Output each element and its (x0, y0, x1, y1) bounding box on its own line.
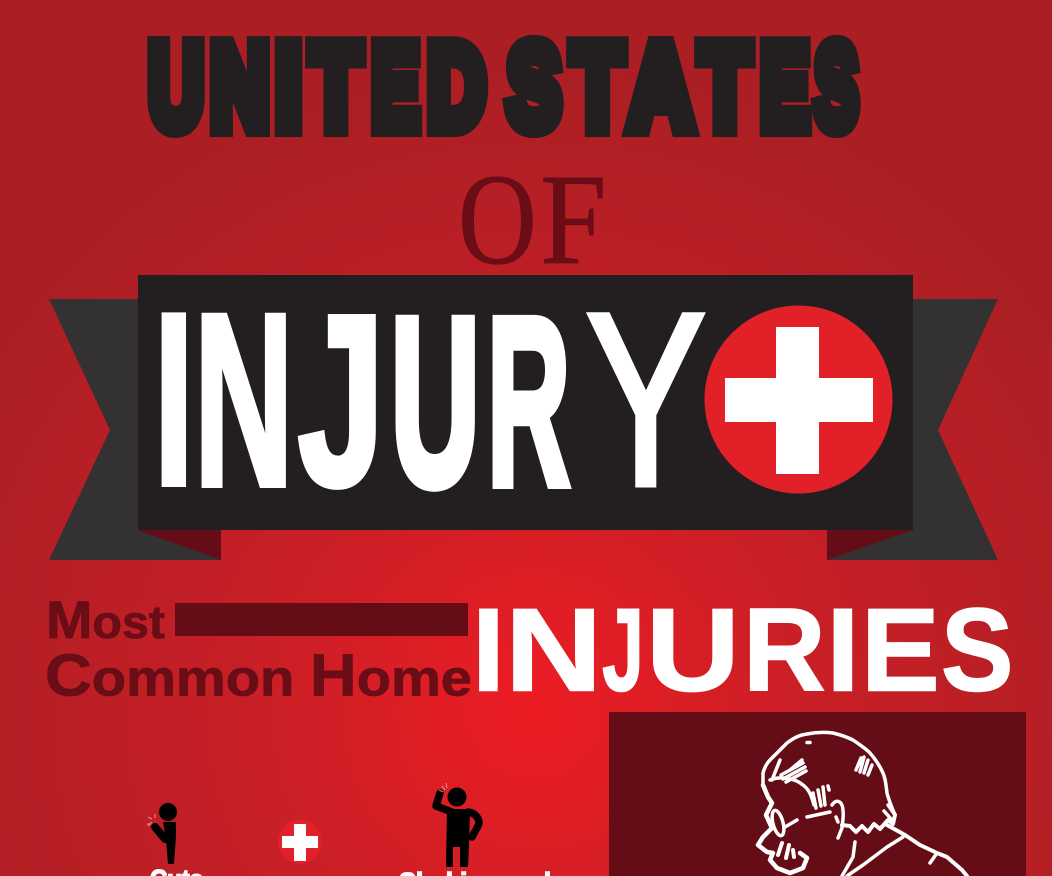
title: United States: E (761, 20, 809, 153)
icon: small medical cross (278, 820, 322, 864)
icon: person with head injury (436, 783, 479, 867)
heading: injuries: S (941, 584, 1013, 717)
title: injury: J (298, 266, 384, 536)
title: injury (152, 258, 706, 540)
title: United States: T (700, 19, 750, 153)
heading: most common home: Common Home (45, 642, 472, 708)
heading: injuries: N (505, 583, 602, 716)
title: injury: N (194, 264, 293, 538)
title: United States: S (815, 21, 858, 154)
ribbon right fold (827, 530, 913, 560)
heading bar (175, 603, 468, 636)
injury spark (147, 814, 155, 826)
title: United States: U (149, 21, 203, 154)
icon: person with cut hand (147, 803, 177, 864)
title: United States (149, 19, 858, 154)
heading: injuries: J (602, 583, 644, 716)
illustration: old man with back pain (758, 732, 967, 876)
icon: medical cross (704, 306, 892, 494)
title: injury: I (152, 258, 196, 540)
title: United States: N (211, 20, 269, 153)
title: United States: A (629, 21, 693, 154)
title: United States: D (428, 21, 485, 153)
title: United States: T (572, 20, 623, 153)
heading: most common home: Most (46, 591, 165, 650)
title: of: O (458, 147, 537, 291)
title: United States: I (276, 20, 301, 153)
heading: injuries: R (743, 584, 826, 716)
ribbon main band (138, 275, 913, 530)
panel: illustration (609, 712, 1026, 876)
title: United States: E (372, 20, 419, 153)
heading: injuries: E (861, 584, 940, 716)
title: of (458, 147, 607, 292)
ribbon right tail (827, 299, 998, 560)
heading: most common home (45, 591, 472, 708)
title: injury: U (391, 270, 480, 536)
title: injury: Y (586, 262, 706, 537)
ribbon banner (49, 275, 998, 560)
title: injury: R (487, 268, 570, 535)
heading: injuries: U (646, 585, 740, 716)
injury spark (439, 783, 447, 792)
heading: injuries: I (826, 584, 859, 716)
heading: injuries: I (472, 584, 505, 716)
heading: injuries (472, 583, 1013, 717)
title: United States: S (507, 21, 561, 153)
title: United States: T (311, 19, 361, 153)
ribbon left fold (138, 530, 221, 560)
ribbon left tail (49, 299, 221, 560)
title: of: F (540, 149, 607, 292)
